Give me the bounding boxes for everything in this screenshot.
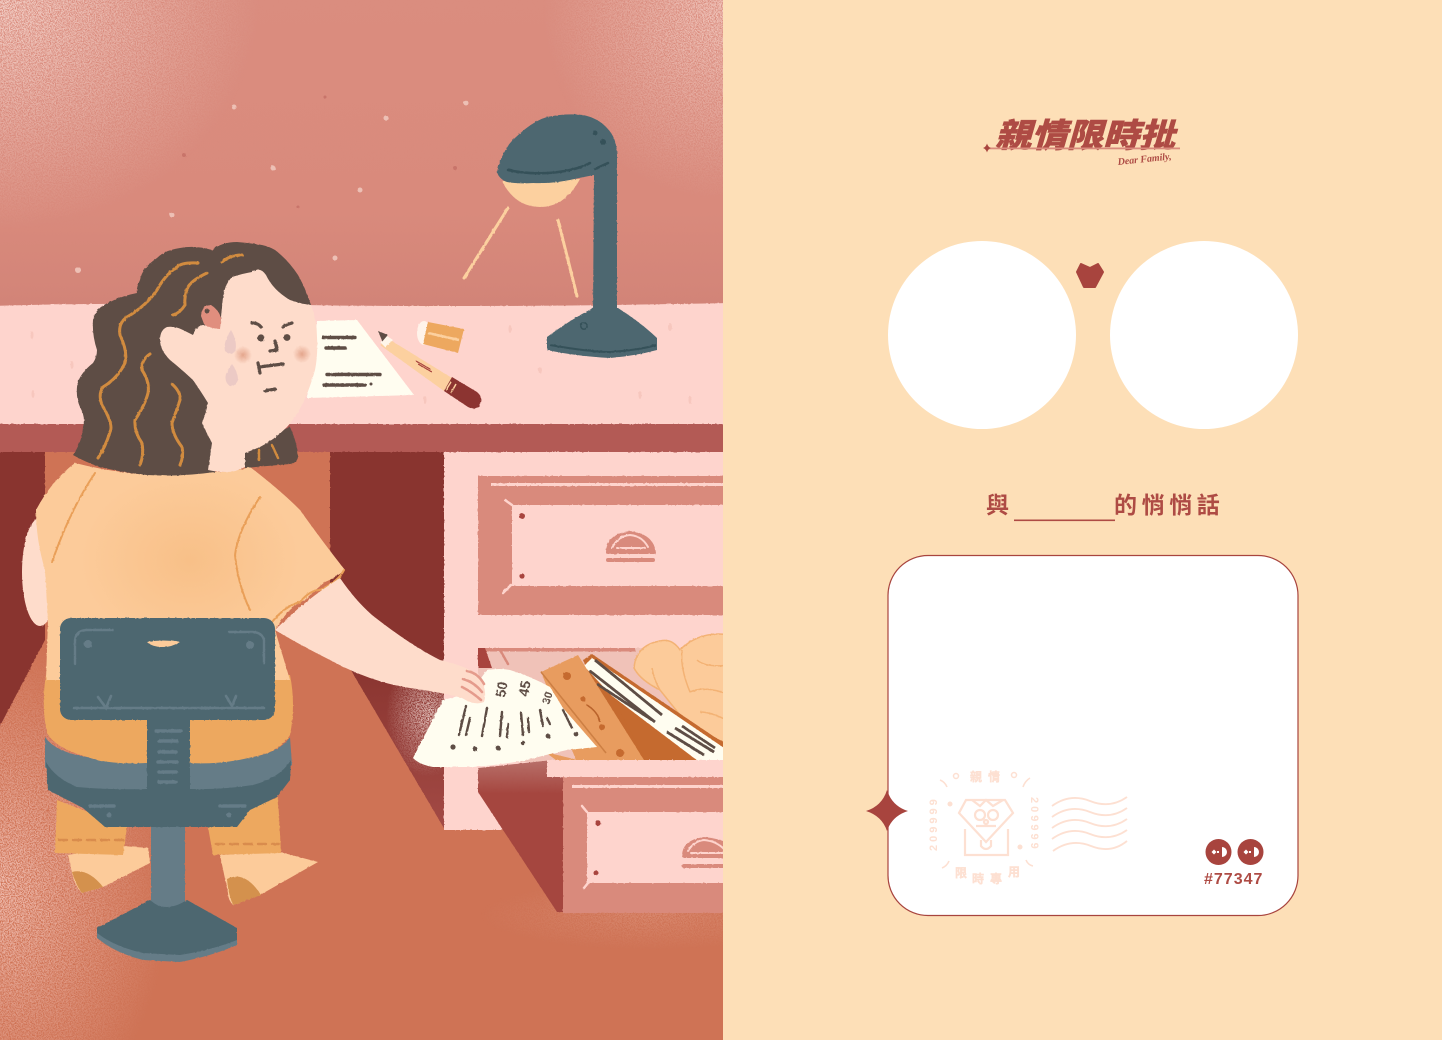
background: cream right panel xyxy=(723,0,1442,1040)
icon: code buttons xyxy=(1206,839,1264,865)
desk edge xyxy=(0,424,730,452)
desk lamp xyxy=(464,114,657,358)
icon: heart xyxy=(1077,264,1103,287)
heading: whisper line xyxy=(986,492,1224,521)
lamp bulb xyxy=(502,179,580,207)
cabinet xyxy=(444,452,730,830)
postmark stamp xyxy=(928,769,1040,886)
chair base xyxy=(97,900,237,962)
crumpled cloth xyxy=(634,634,730,745)
legs and feet xyxy=(55,797,318,905)
open drawer xyxy=(478,634,730,913)
icon: four-point star xyxy=(866,790,908,831)
stamp bottom text: 專 xyxy=(990,871,1002,886)
message card xyxy=(866,556,1298,916)
numbers on paper xyxy=(492,679,556,706)
desk top xyxy=(0,303,730,424)
drawer lip xyxy=(547,760,730,777)
numbers on paper: 30 xyxy=(540,691,556,706)
chair back xyxy=(60,618,275,720)
wall xyxy=(0,0,730,306)
heading prefix: 與 xyxy=(986,492,1009,518)
pencil xyxy=(378,331,481,409)
icon: drawer handle xyxy=(606,531,656,562)
sheet of paper on desk xyxy=(307,320,414,398)
heading suffix: 的悄悄話 xyxy=(1114,492,1224,518)
right photo circle xyxy=(1110,241,1298,429)
far arm xyxy=(22,518,58,626)
lamp shade and neck xyxy=(497,114,617,310)
logo subtitle: Dear Family, xyxy=(1116,151,1172,168)
chair xyxy=(45,618,292,962)
logo title: 親情限時批 xyxy=(992,109,1186,157)
logo xyxy=(983,109,1186,168)
facial features xyxy=(252,323,292,391)
left photo circle xyxy=(888,241,1076,429)
shirt xyxy=(36,463,345,680)
chair post xyxy=(151,825,185,907)
stamp right digits: 209999 xyxy=(1028,797,1040,852)
pencil sharpener xyxy=(417,321,464,353)
numbers on paper: 45 xyxy=(515,679,534,698)
dark folder with striped papers xyxy=(583,654,730,762)
blush xyxy=(234,346,252,364)
postmark wavy lines xyxy=(1052,797,1127,851)
light rays xyxy=(464,208,577,296)
stamp bottom text: 用 xyxy=(1008,865,1020,879)
code label: #77347 xyxy=(1204,871,1263,888)
person xyxy=(22,242,345,767)
arm and hand xyxy=(275,578,485,703)
logo underline xyxy=(989,148,1180,149)
stamp left digits: 209999 xyxy=(928,796,940,851)
hair xyxy=(73,242,311,476)
pants xyxy=(44,675,293,767)
stamp bottom text: 限 xyxy=(955,866,967,880)
floor and dark back wall xyxy=(0,452,730,1040)
tears xyxy=(225,330,236,354)
chair stem xyxy=(147,715,190,791)
paper in hand xyxy=(413,669,597,767)
stamp envelope heart xyxy=(959,800,1013,855)
top drawer xyxy=(478,476,730,615)
logo star xyxy=(983,144,991,152)
illustration panel xyxy=(0,0,730,1040)
drawer front xyxy=(563,777,730,913)
icon: lower drawer handle xyxy=(682,837,730,868)
card outline xyxy=(888,556,1298,916)
stamp bottom text: 時 xyxy=(972,871,984,886)
lamp base xyxy=(547,308,657,358)
stamp top text: 親情 xyxy=(970,769,1006,784)
back hair xyxy=(245,427,298,468)
stamp bottom text xyxy=(955,865,1020,886)
hair strands xyxy=(98,255,242,465)
blank line xyxy=(1014,520,1115,521)
head xyxy=(160,270,317,472)
ear xyxy=(201,305,221,329)
drawer side xyxy=(478,760,563,912)
seat xyxy=(45,737,292,790)
numbers on paper: 50 xyxy=(492,680,511,699)
orange folder xyxy=(541,655,644,760)
